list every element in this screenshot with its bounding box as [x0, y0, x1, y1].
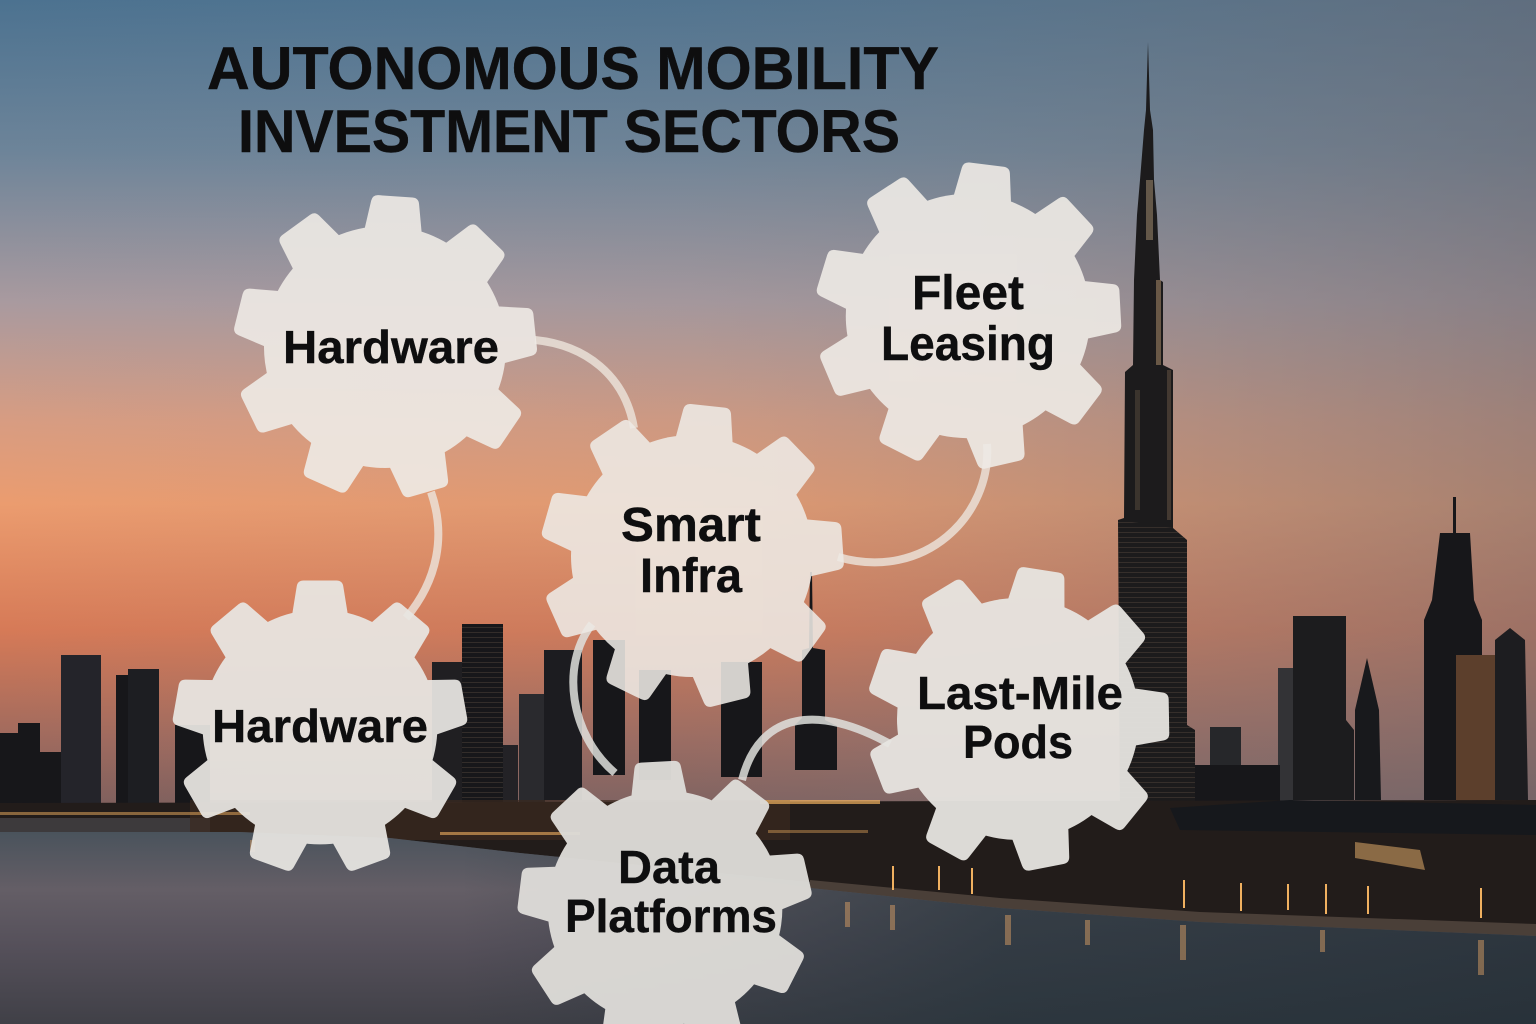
gear: Smart Infra: Infra: [640, 550, 742, 603]
connector: Hardware to lower Hardware: [406, 492, 438, 618]
title: AUTONOMOUS MOBILITY: [207, 35, 939, 102]
gear: Last-Mile Pods: Last-Mile: [917, 667, 1123, 719]
gear: Last-Mile Pods: Pods: [963, 716, 1073, 768]
gear: Data Platforms: [508, 754, 822, 1024]
gear: Last-Mile Pods: [842, 546, 1193, 893]
connector: Hardware to Smart Infra: [535, 340, 634, 428]
gear: Smart Infra: Smart: [621, 499, 761, 552]
background: Dubai skyline buildings: [0, 497, 1528, 814]
gear: Smart Infra: [523, 390, 861, 723]
connector: Fleet Leasing to Smart Infra: [838, 444, 987, 562]
gear: Hardware (top): Hardware: [283, 321, 499, 373]
gear: Fleet Leasing: [795, 146, 1141, 487]
gear: Hardware (top): [221, 186, 549, 509]
title: INVESTMENT SECTORS: [238, 98, 900, 165]
gear: Fleet Leasing: Fleet: [912, 267, 1024, 320]
background: waterfront land and lights: [0, 800, 1536, 936]
background: water: [0, 832, 1536, 1024]
connector: Data Platforms to Last-Mile Pods: [742, 720, 890, 780]
gear: Hardware (lower): Hardware: [212, 700, 428, 752]
connector: Smart Infra to Data Platforms: [573, 624, 615, 773]
gear: Data Platforms: Data: [618, 841, 720, 893]
gear: Hardware (lower): [171, 581, 469, 874]
background: Burj Khalifa tower: [1118, 42, 1195, 810]
title: [207, 35, 939, 165]
gear: Fleet Leasing: Leasing: [881, 318, 1055, 371]
gear: Data Platforms: Platforms: [565, 890, 777, 942]
